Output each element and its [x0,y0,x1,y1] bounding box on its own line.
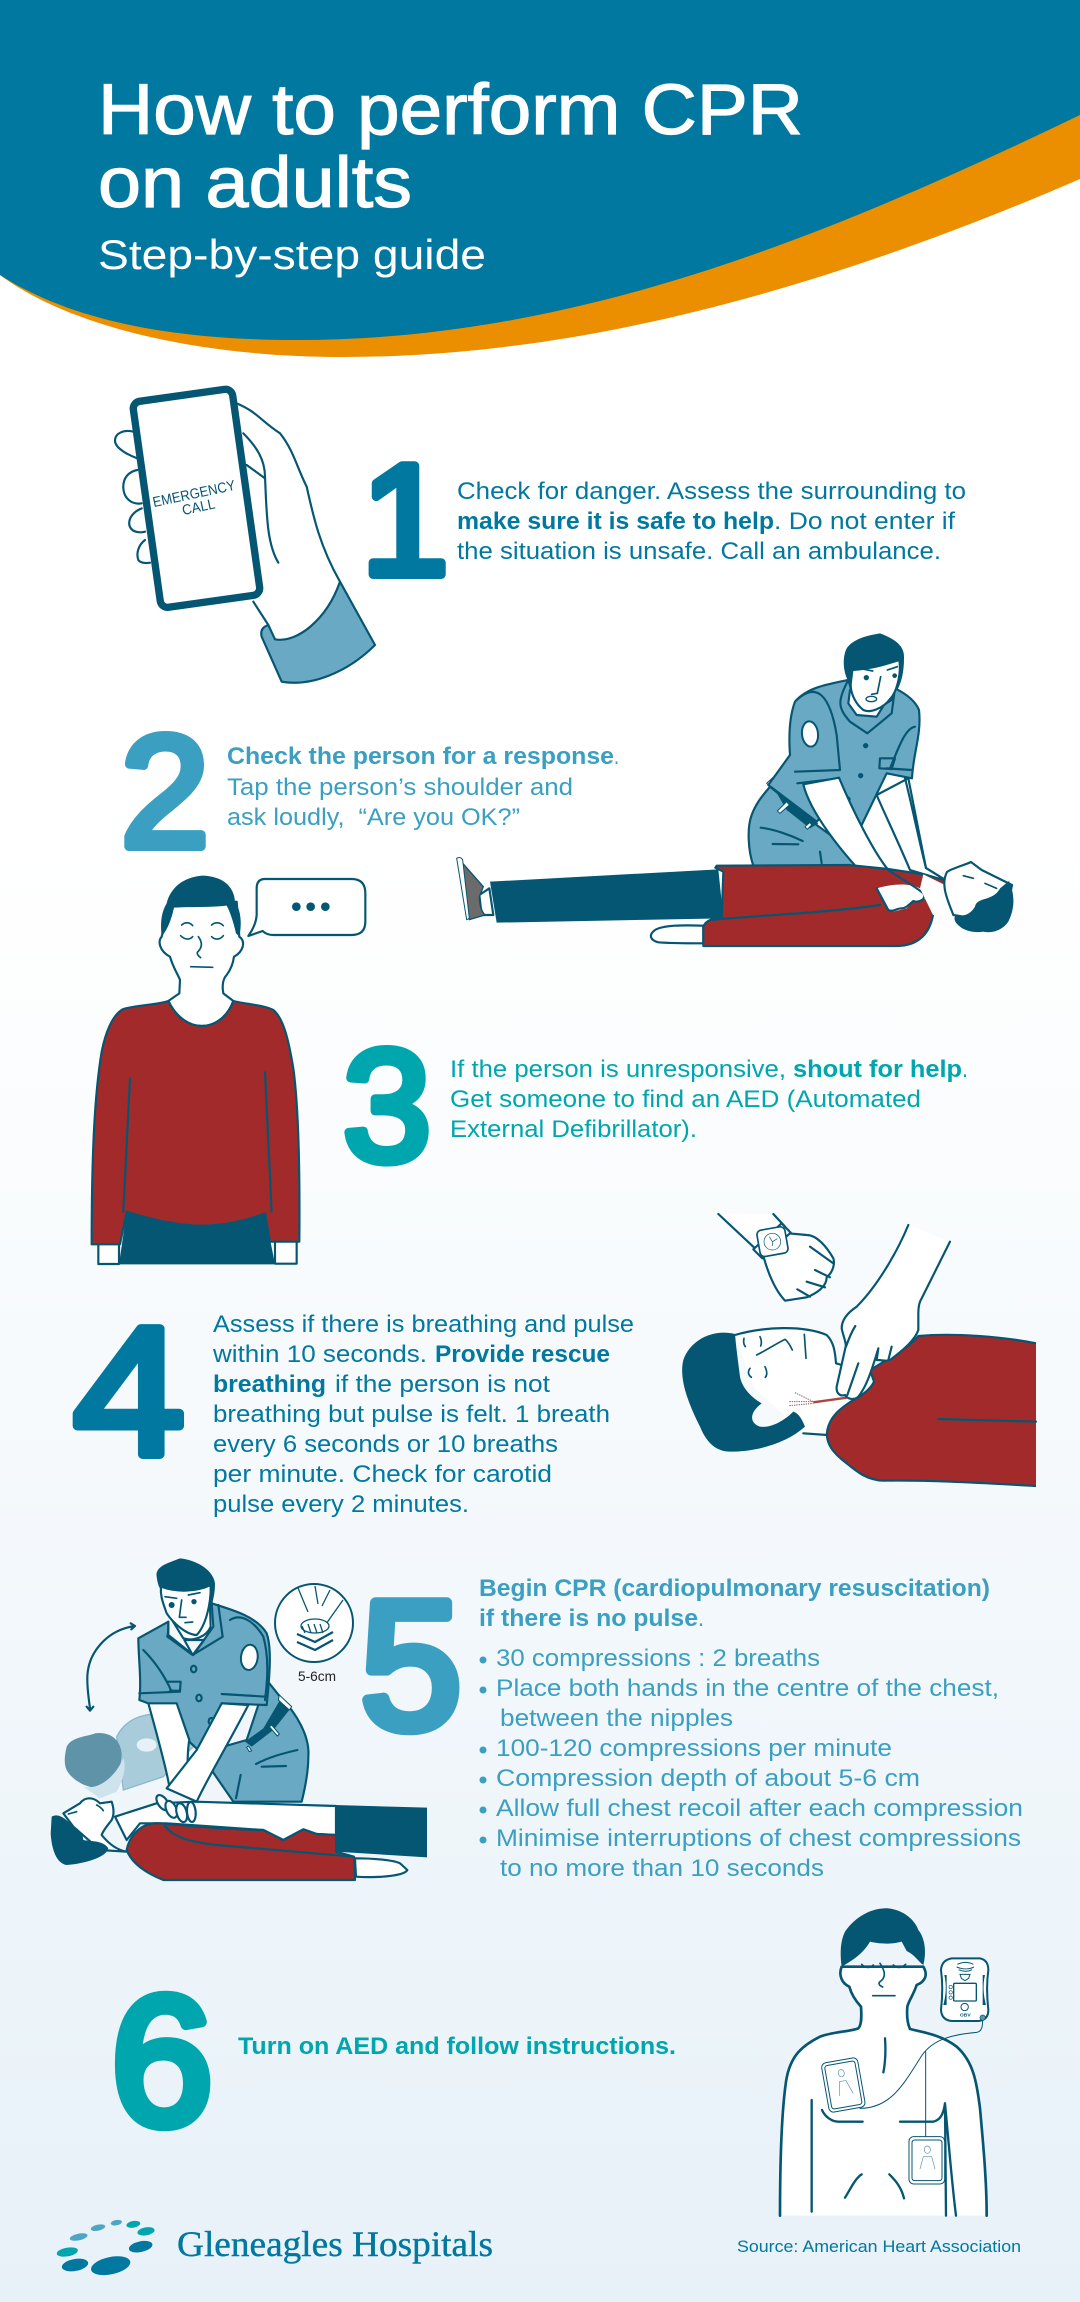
title: How to perform CPR [98,71,803,150]
step 6 number: 6 [111,1958,213,2163]
step 4 number: 4 [73,1288,185,1494]
trousers [119,1212,275,1264]
patient hand [355,1858,407,1877]
step 5 text [479,1575,1023,1882]
belt [770,777,818,828]
patient arm and hand [651,925,703,943]
illustration: standing person speaking [92,876,365,1264]
step 2 text [227,743,619,831]
step 2 text: Tap the person’s shoulder and [227,774,573,801]
illustration: checking carotid pulse with watch [682,1214,1036,1486]
patient hair [682,1333,805,1452]
faded rescuer giving breaths [65,1714,197,1798]
rescuer arms [148,1703,189,1787]
phone label [151,478,240,525]
patient foot [479,888,493,915]
step 4 text: Assess if there is breathing and pulse [213,1311,634,1338]
patient head [63,1798,127,1852]
speech bubble [248,879,365,936]
step 3 text: shout for help [793,1056,962,1083]
AED device [941,1958,988,2021]
illustration: chest compressions [51,1558,427,1880]
step 5 bullet list: Allow full chest recoil after each compression [496,1795,1023,1822]
head and neck [160,902,243,1026]
illustration: hand holding phone [115,388,375,683]
patient sweater [127,1823,355,1880]
patient chest [115,1802,336,1840]
checking hand [837,1225,950,1399]
source note: Source: American Heart Association [737,2237,1021,2256]
illustration: AED pads on patient [780,1908,988,2216]
step 2 text: ask loudly, “Are you OK?” [227,804,520,831]
motion arrow [87,1623,135,1711]
step 5 heading: . [698,1605,704,1632]
far arm [877,778,947,881]
step 1 text [457,478,966,565]
step 5 bullet list: 30 compressions : 2 breaths [496,1645,820,1672]
step 4 text: breathing [213,1371,326,1398]
patient legs [490,869,723,923]
title line two: on adults [98,144,412,223]
step 5 bullet list: Compression depth of about 5-6 cm [496,1765,920,1792]
step 1 text: Check for danger. Assess the surrounding to [457,478,966,505]
rescuer neck and head [170,1607,211,1639]
step 3 text [450,1056,968,1143]
phone label: EMERGENCY [151,478,237,511]
compressing hands [154,1793,197,1823]
step 3 text: If the person is unresponsive, [450,1056,786,1083]
step 4 text: every 6 seconds or 10 breaths [213,1431,558,1458]
step 5 bullet list: Place both hands in the centre of the chest, [496,1675,999,1702]
step 4 text: Provide rescue [435,1341,610,1368]
step 3 text: External Defibrillator). [450,1116,697,1143]
step 4 text: within 10 seconds. [212,1341,427,1368]
responder neck and face [848,690,888,717]
step 4 text: per minute. Check for carotid [213,1461,552,1488]
step 3 text: Get someone to find an AED (Automated [450,1086,921,1113]
patient legs [335,1805,427,1857]
logo mark [56,2219,155,2278]
step 1 text: . Do not enter if [774,508,955,535]
wrist with watch [718,1214,834,1301]
phone [132,388,261,608]
step 4 text: if the person is not [335,1371,550,1398]
step 1 number: 1 [361,432,449,608]
responder hand [877,884,927,912]
hair [161,876,241,937]
lead wires [860,2020,983,2137]
step 5 heading: if there is no pulse [479,1605,698,1632]
depth inset [275,1584,353,1684]
patient torso [827,1335,1036,1486]
step 5 heading [479,1575,990,1632]
header banner [0,0,1080,357]
step 6 text: Turn on AED and follow instructions. [238,2033,676,2060]
logo wordmark: Gleneagles Hospitals [177,2224,493,2264]
lower pad [909,2137,945,2184]
step 5 bullet list: Minimise interruptions of chest compressions [496,1825,1021,1852]
illustration: checking the person for a response [457,633,1013,946]
patient neck and head [920,874,962,915]
step 5 heading: Begin CPR (cardiopulmonary resuscitation) [479,1575,990,1602]
carotid artery [789,1393,847,1406]
responder trousers [749,787,873,866]
step 1 text: make sure it is safe to help [457,508,774,535]
belt [245,1700,289,1747]
responder shirt [768,680,920,825]
patient torso [703,865,947,946]
step 5 bullet list: to no more than 10 seconds [500,1855,824,1882]
rescuer trousers [200,1680,308,1802]
step 5 bullet list: 100-120 compressions per minute [496,1735,892,1762]
step 3 number: 3 [343,1016,431,1194]
step 3 text: . [962,1056,968,1083]
hair [841,1908,925,1967]
patient head [735,1328,874,1435]
device button label: OBV [960,2013,971,2019]
patient hair [51,1815,108,1865]
step 5 number: 5 [360,1563,462,1767]
depth label: 5-6cm [298,1668,336,1684]
step 1 text: the situation is unsafe. Call an ambulance. [457,538,941,565]
step 4 text [212,1311,634,1518]
step 4 text: breathing but pulse is felt. 1 breath [213,1401,610,1428]
step 4 text: pulse every 2 minutes. [213,1491,469,1518]
step 2 text: Check the person for a response [227,743,614,770]
step 5 bullet list [480,1645,1023,1882]
patient torso [780,1967,987,2216]
near arm [803,778,923,910]
sweater [92,1001,299,1244]
upper pad [821,2057,866,2113]
rescuer shirt [138,1603,270,1752]
cuffs [98,1243,119,1264]
step 2 text: . [614,743,619,770]
phone label: CALL [181,496,217,519]
step 5 bullet list: between the nipples [500,1705,733,1732]
subtitle: Step-by-step guide [98,231,486,278]
step 2 number: 2 [121,702,209,880]
